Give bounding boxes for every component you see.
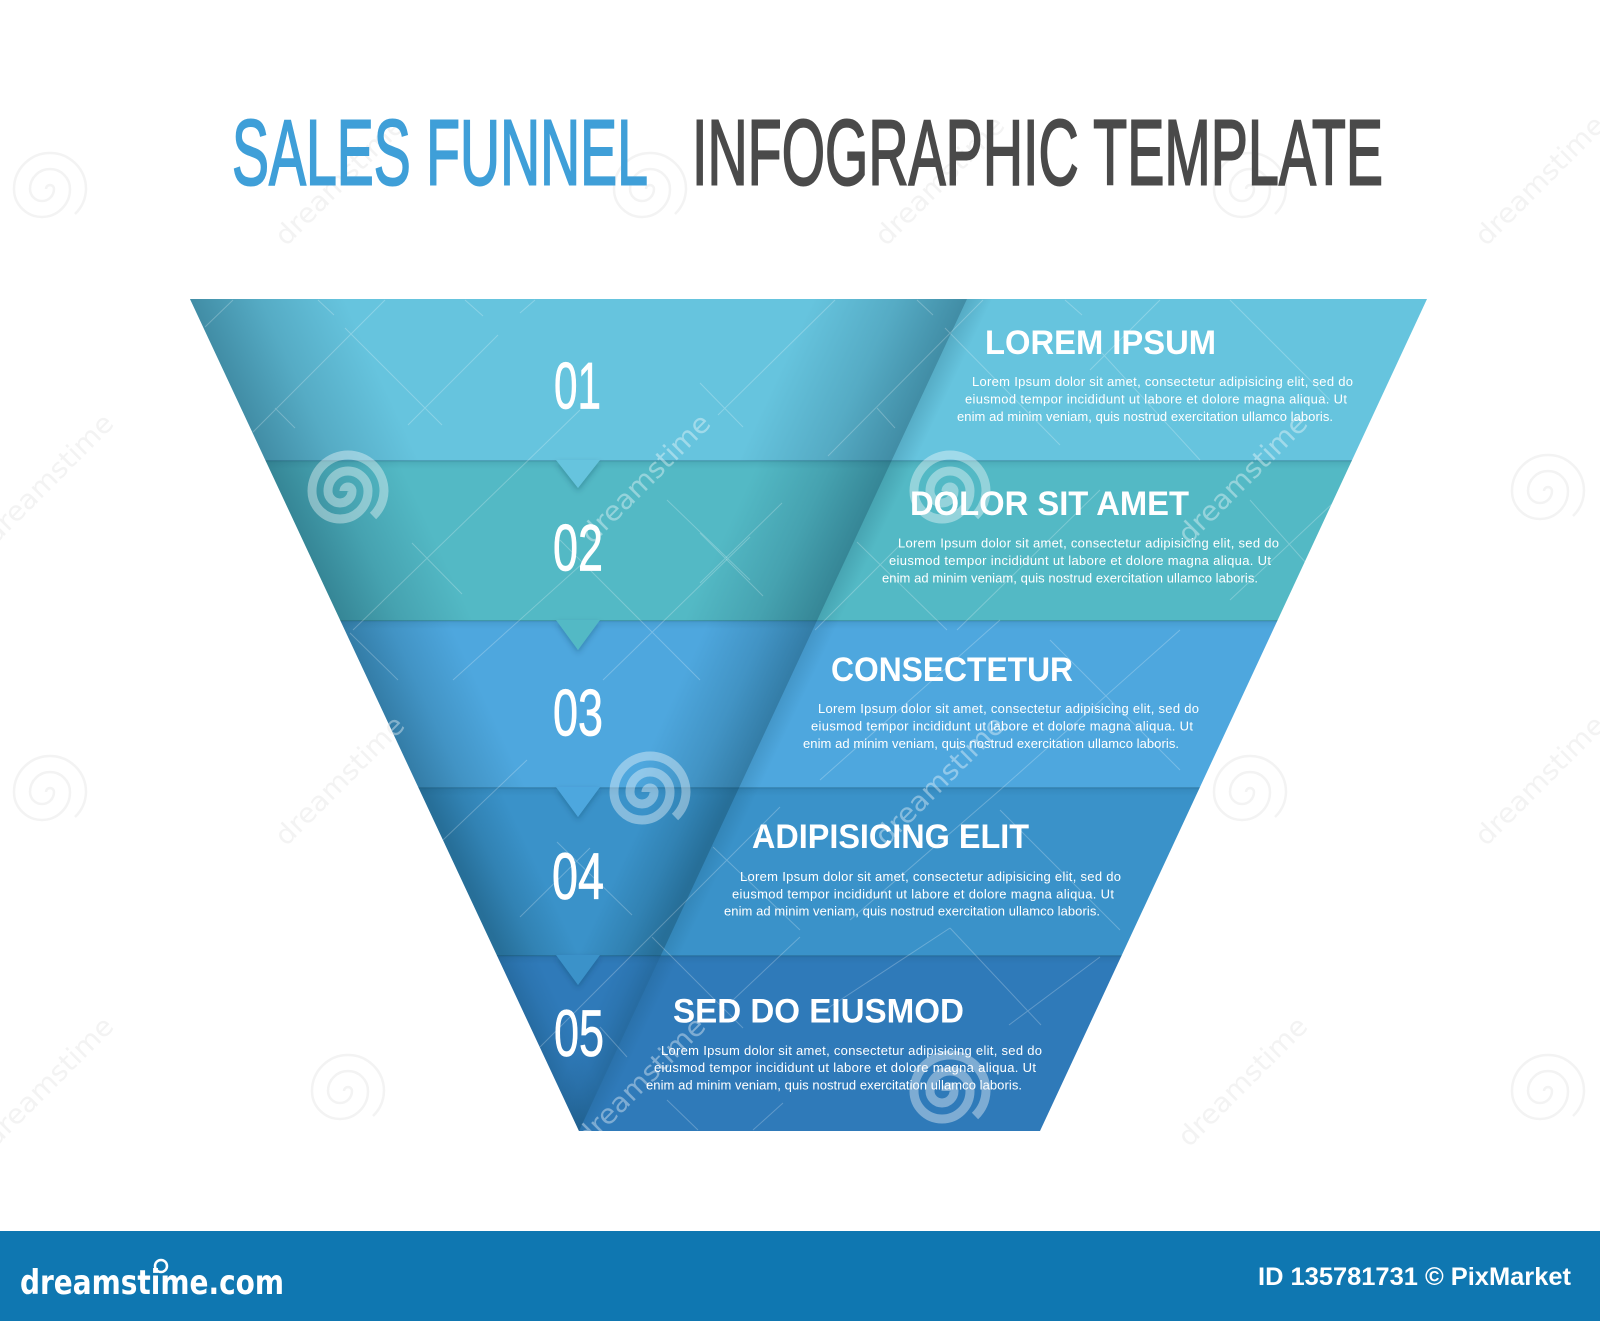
shadow: left funnel edge and centre triangle fold <box>180 299 980 1131</box>
watermark on white background: dreamstime <box>269 110 411 252</box>
footer: image id: ID 135781731 © PixMarket <box>1258 1263 1572 1291</box>
text block: adipisicing elit: eiusmod tempor incididunt ut labore et dolore magna aliqua. Ut <box>732 886 1114 902</box>
watermark on white background: dreamstime <box>869 110 1011 252</box>
step numbers: 03 <box>553 676 603 750</box>
step numbers <box>552 348 604 1070</box>
step numbers: 05 <box>554 996 604 1070</box>
text block: dolor sit amet: Lorem Ipsum dolor sit amet, consectetur adipisicing elit, sed do <box>898 536 1279 550</box>
text block: consectetur: Lorem Ipsum dolor sit amet, consectetur adipisicing elit, sed do <box>818 701 1199 716</box>
footer: site logo: dreamstime.com <box>20 1263 284 1303</box>
watermark on white background <box>0 110 1600 1153</box>
text block: adipisicing elit <box>724 818 1121 918</box>
step numbers: 02 <box>553 510 603 584</box>
text block: lorem ipsum: enim ad minim veniam, quis nostrud exercitation ullamco laboris. <box>957 409 1333 424</box>
text block: sed do eiusmod: eiusmod tempor incididunt ut labore et dolore magna aliqua. Ut <box>654 1060 1036 1075</box>
arrow: band 2 to 3 <box>556 620 600 650</box>
text block: consectetur: enim ad minim veniam, quis nostrud exercitation ullamco laboris. <box>803 736 1179 751</box>
watermark lines on funnel <box>205 300 1400 1130</box>
watermark on funnel: dreamstime <box>269 710 411 852</box>
arrow: band 3 to 4 <box>556 787 600 817</box>
text block: sed do eiusmod: enim ad minim veniam, quis nostrud exercitation ullamco laboris. <box>646 1078 1022 1092</box>
text block: sed do eiusmod: Lorem Ipsum dolor sit amet, consectetur adipisicing elit, sed do <box>661 1043 1042 1058</box>
arrow: band 4 to 5 <box>556 955 600 985</box>
text block: dolor sit amet <box>882 485 1279 586</box>
title <box>232 100 1383 204</box>
text block: sed do eiusmod <box>646 992 1042 1092</box>
text block: consectetur <box>803 651 1199 751</box>
arrow: band 1 to 2 <box>556 460 600 488</box>
shadow: fold on right panels <box>579 299 984 1131</box>
text block: dolor sit amet: eiusmod tempor incididunt ut labore et dolore magna aliqua. Ut <box>889 553 1271 568</box>
text block: dolor sit amet: enim ad minim veniam, quis nostrud exercitation ullamco laboris. <box>882 570 1258 586</box>
step numbers: 04 <box>552 839 604 913</box>
text block: consectetur: eiusmod tempor incididunt ut labore et dolore magna aliqua. Ut <box>811 718 1193 734</box>
panel: band 4 <box>418 788 1200 956</box>
watermark on funnel <box>269 408 1314 1153</box>
text block: lorem ipsum: eiusmod tempor incididunt ut labore et dolore magna aliqua. Ut <box>965 392 1347 406</box>
text block: lorem ipsum <box>957 324 1353 424</box>
text block: adipisicing elit: enim ad minim veniam, quis nostrud exercitation ullamco laboris. <box>724 904 1100 918</box>
watermark on white background: dreamstime <box>269 710 411 852</box>
panel: band 1 <box>180 299 1440 461</box>
panel: band 3 <box>340 621 1278 788</box>
watermark on funnel: dreamstime <box>570 1011 712 1153</box>
text block: lorem ipsum: LOREM IPSUM <box>985 324 1216 362</box>
watermark on funnel: dreamstime <box>869 710 1011 852</box>
text block: consectetur: CONSECTETUR <box>831 651 1073 689</box>
panel: band 5 <box>497 956 1122 1131</box>
watermark on white background: dreamstime <box>1172 1011 1314 1153</box>
text block: adipisicing elit: ADIPISICING ELIT <box>752 818 1029 856</box>
icon: logo spiral <box>155 1260 167 1272</box>
title: sales funnel: SALES FUNNEL <box>232 100 648 204</box>
text block: sed do eiusmod: SED DO EIUSMOD <box>673 992 964 1030</box>
funnel chart <box>180 290 1440 1140</box>
watermark on funnel: dreamstime <box>1172 408 1314 550</box>
panel: band 2 <box>266 461 1352 621</box>
step numbers: 01 <box>554 348 601 422</box>
footer bar <box>0 1231 1600 1321</box>
text block: lorem ipsum: Lorem Ipsum dolor sit amet, consectetur adipisicing elit, sed do <box>972 374 1353 389</box>
text block: dolor sit amet: DOLOR SIT AMET <box>910 485 1189 523</box>
shadow: band separators <box>265 460 1352 958</box>
text block: adipisicing elit: Lorem Ipsum dolor sit amet, consectetur adipisicing elit, sed do <box>740 869 1121 884</box>
watermark on funnel: dreamstime <box>575 408 717 550</box>
